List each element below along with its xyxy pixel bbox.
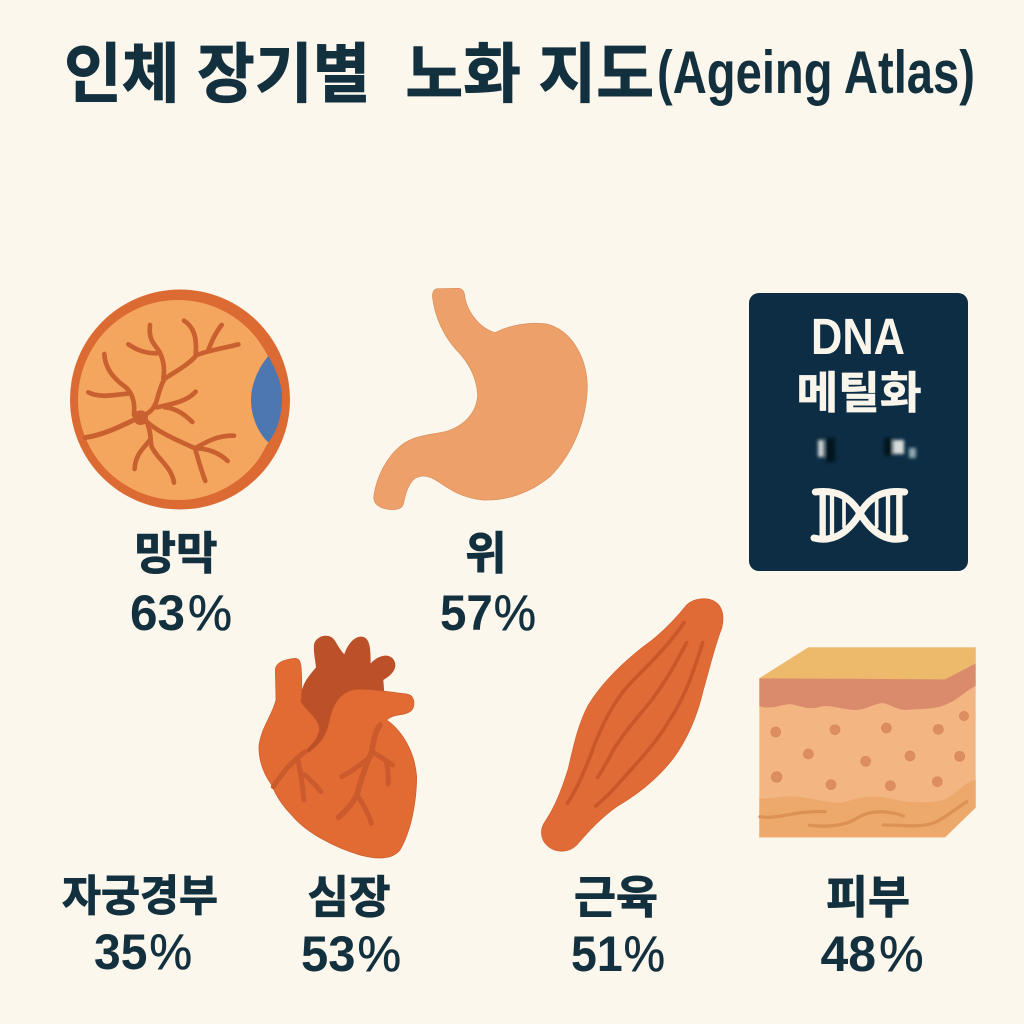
label: cervix: 자궁경부 bbox=[62, 873, 218, 921]
label: retina: 망막 bbox=[134, 528, 218, 579]
label: skin bbox=[820, 872, 923, 982]
label: stomach: 57% bbox=[440, 585, 536, 641]
label: heart: 심장 bbox=[308, 872, 390, 923]
panel: DNA methylation: DNA bbox=[811, 308, 905, 365]
icon: DNA helix bbox=[814, 491, 905, 539]
panel: DNA methylation: 메틸화 bbox=[796, 369, 922, 418]
label: stomach bbox=[440, 528, 536, 641]
label: muscle: 51% bbox=[571, 926, 665, 982]
label: heart bbox=[301, 872, 401, 982]
label: skin: 피부 bbox=[826, 872, 910, 923]
icon: retina bbox=[70, 290, 290, 510]
icon: muscle bbox=[541, 599, 723, 851]
icon: stomach bbox=[374, 288, 587, 510]
label: cervix bbox=[62, 873, 218, 980]
label: retina: 63% bbox=[130, 585, 232, 641]
icon: heart bbox=[259, 636, 417, 858]
icon: skin bbox=[759, 647, 976, 837]
label: retina bbox=[130, 528, 232, 641]
label: heart: 53% bbox=[301, 926, 401, 982]
label: muscle: 근육 bbox=[574, 872, 658, 923]
label: cervix: 35% bbox=[94, 924, 192, 980]
title bbox=[64, 38, 975, 110]
label: skin: 48% bbox=[820, 926, 923, 982]
title: 인체 장기별 노화 지도 bbox=[64, 38, 654, 110]
label: muscle bbox=[571, 872, 665, 982]
panel: DNA methylation bbox=[749, 293, 968, 571]
icon: blurred marks bbox=[818, 438, 916, 462]
label: stomach: 위 bbox=[465, 528, 507, 579]
